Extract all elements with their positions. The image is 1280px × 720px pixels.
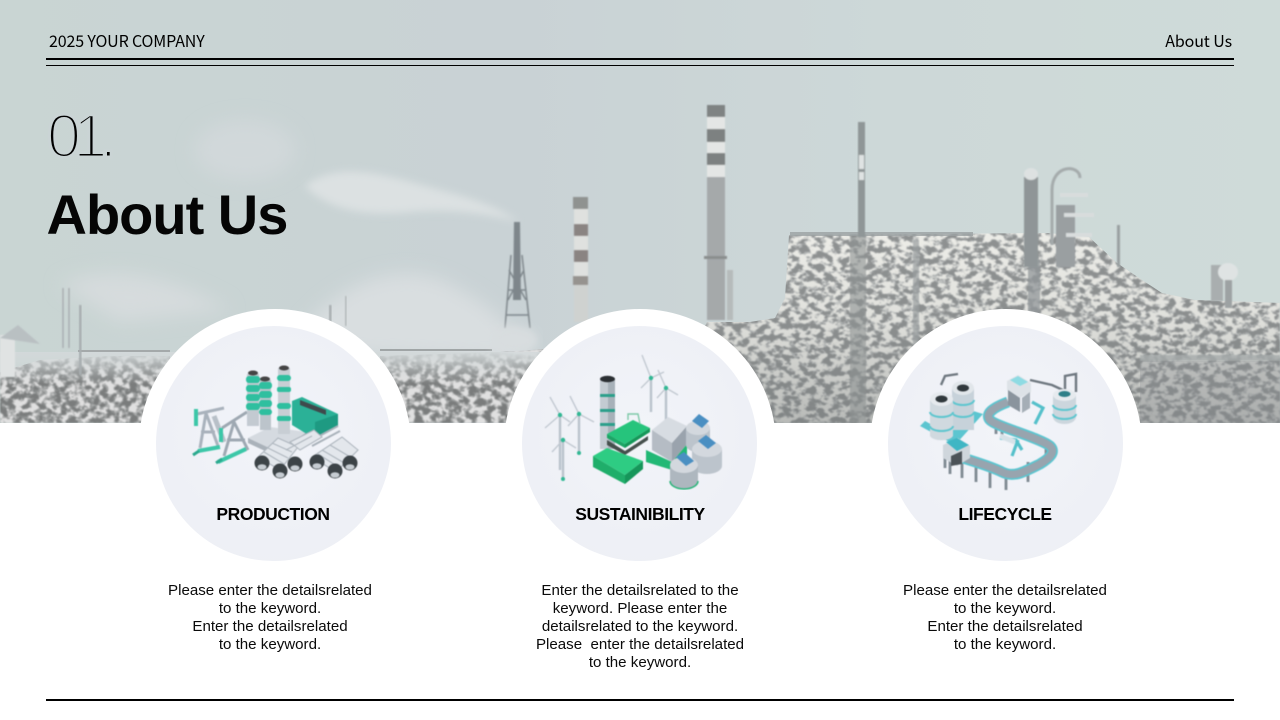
- low plant buildings left and centre: [0, 288, 544, 423]
- outer white ring: [504, 309, 776, 581]
- inner circle: [888, 326, 1123, 561]
- icon: production plant: [192, 364, 359, 480]
- refinery plant: [705, 232, 1280, 423]
- icon: lifecycle conveyor: [920, 372, 1078, 491]
- chimney: [600, 379, 615, 449]
- header rule: [46, 58, 1234, 66]
- text: lifecycle description: to the keyword.: [954, 600, 1056, 616]
- outer white ring: [870, 309, 1142, 581]
- text: production description: Enter the detailsrelated: [192, 618, 348, 634]
- teal building: [292, 397, 338, 439]
- header: company name: 2025 YOUR COMPANY: [49, 28, 205, 52]
- tall striped chimney: [704, 105, 733, 320]
- columns: [247, 374, 259, 426]
- conveyor belt: [960, 402, 1052, 474]
- smoke plumes: [60, 120, 530, 360]
- tanks: [254, 454, 358, 478]
- text: sustainability description: Enter the detailsrelated to the: [541, 582, 739, 598]
- inner circle: [156, 326, 391, 561]
- text: sustainability description: to the keyword.: [589, 654, 691, 670]
- inner circle: [522, 326, 757, 561]
- text: lifecycle description: Enter the detailsrelated: [927, 618, 1083, 634]
- panel: lifecycle: [872, 309, 1140, 561]
- gray and green block: [646, 444, 687, 470]
- striped chimney left: [573, 197, 588, 322]
- title: About Us: [46, 182, 287, 246]
- text: production description: Please enter the detailsrelated: [168, 582, 372, 598]
- entry box: [943, 438, 970, 466]
- header: section name: About Us: [1165, 28, 1232, 52]
- pipes: [941, 374, 1076, 392]
- text: production description: to the keyword.: [219, 600, 321, 616]
- text: sustainability description: Please enter the detailsrelated: [536, 636, 744, 652]
- robot arms: [1000, 402, 1043, 456]
- tall mast: [858, 122, 865, 237]
- text: sustainability description: detailsrelated to the keyword.: [542, 618, 738, 634]
- machine box: [1007, 375, 1031, 398]
- background photo: refinery skyline: [0, 0, 1280, 423]
- text: sustainability description: [536, 582, 744, 670]
- solar tanks: [670, 414, 722, 489]
- text: sustainability description: keyword. Please enter the: [553, 600, 727, 616]
- label: sustainability: SUSTAINIBILITY: [575, 504, 705, 524]
- green slab: [607, 420, 650, 444]
- icon: sustainability plant: [544, 354, 722, 490]
- outer white ring: [139, 309, 411, 581]
- label: production: PRODUCTION: [216, 504, 330, 524]
- conveyor legs: [945, 420, 1046, 490]
- text: lifecycle description: to the keyword.: [954, 636, 1056, 652]
- wire frames: [258, 430, 358, 472]
- footer rule: [46, 699, 1234, 701]
- text: lifecycle description: [903, 582, 1107, 652]
- panel: production: [140, 309, 410, 561]
- tanks: [930, 381, 1076, 440]
- text: production description: to the keyword.: [219, 636, 321, 652]
- green low box: [593, 448, 643, 475]
- wind turbines: [545, 355, 678, 479]
- panel: sustainability: [506, 309, 774, 561]
- flare tower: [490, 222, 538, 354]
- pump jacks: [193, 408, 248, 463]
- label: lifecycle: LIFECYCLE: [958, 504, 1052, 524]
- tank platform: [920, 410, 983, 445]
- text: lifecycle description: Please enter the detailsrelated: [903, 582, 1107, 598]
- text: production description: [168, 582, 372, 652]
- base platform: [248, 427, 307, 452]
- distillation stack and column: [1024, 168, 1238, 308]
